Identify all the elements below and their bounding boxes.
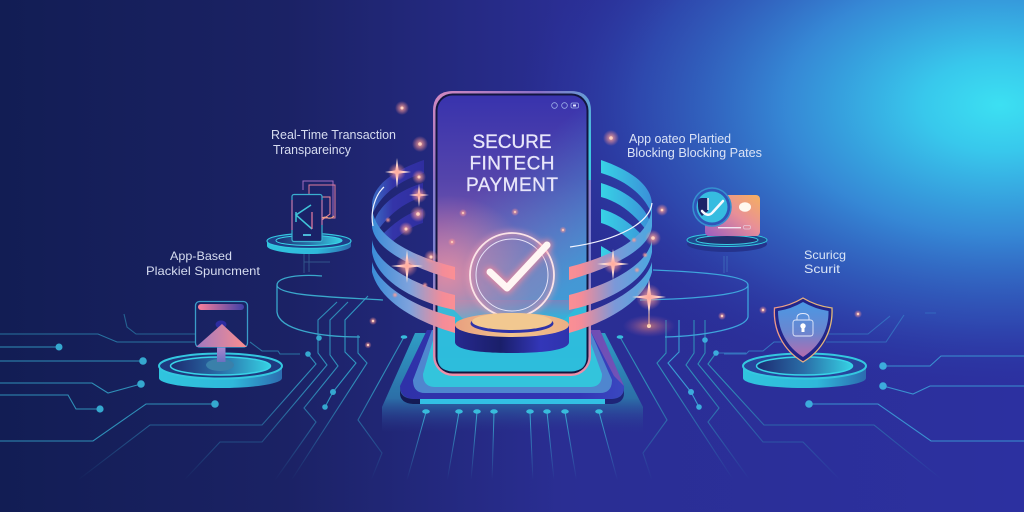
sparkles — [385, 158, 675, 337]
label: app-based — [146, 249, 261, 278]
label: app blocking: App oateo Plartied — [629, 132, 731, 146]
chip base — [382, 330, 643, 432]
icon: transaction phone — [292, 181, 335, 242]
phone — [433, 91, 591, 376]
heading: SECURE — [472, 132, 552, 153]
label: real-time transaction: Transpareincy — [273, 143, 352, 157]
icon: card with check — [693, 188, 760, 236]
chip pins — [401, 335, 623, 483]
label: security: Scurit — [804, 262, 841, 276]
glowing particles — [364, 101, 862, 348]
connector: transaction platform — [304, 254, 330, 273]
label: real-time transaction — [271, 128, 396, 157]
check mark badge — [470, 233, 554, 317]
label: app-based: App-Based — [170, 249, 232, 263]
heading: FINTECH — [470, 154, 554, 174]
circuit lines: left — [0, 296, 404, 490]
platform: app-based payment — [159, 354, 282, 388]
pedestal — [455, 313, 569, 353]
heading: PAYMENT — [466, 175, 558, 196]
back ribbons: right — [601, 160, 652, 262]
label: security: Scuricg — [804, 248, 846, 262]
front ribbons: left — [372, 205, 455, 333]
circuit nodes: right — [688, 337, 887, 410]
front ribbons: right — [569, 205, 652, 333]
platform: transaction — [267, 234, 351, 254]
orbit ring: right — [640, 270, 748, 337]
circuit lines: right — [620, 313, 1024, 495]
teal dome behind pedestal — [438, 296, 586, 371]
ribbon highlights — [372, 187, 652, 247]
label: app-based: Plackiel Spuncment — [146, 264, 261, 278]
status icons — [552, 103, 578, 108]
orbit ring: left — [277, 275, 383, 337]
icon: payment screen with arrow — [196, 302, 248, 371]
circuit nodes: left — [56, 335, 336, 413]
platform: card — [687, 234, 767, 252]
label: app blocking — [627, 132, 762, 160]
label: security — [804, 248, 846, 276]
connector: card platform — [724, 256, 727, 273]
label: app blocking: Blocking Blocking Pates — [627, 146, 762, 160]
back ribbons: left — [372, 160, 424, 245]
label: real-time transaction: Real-Time Transaction — [271, 128, 396, 142]
heading — [466, 132, 558, 196]
platform: security — [743, 354, 866, 388]
icon: shield with lock — [774, 298, 832, 362]
